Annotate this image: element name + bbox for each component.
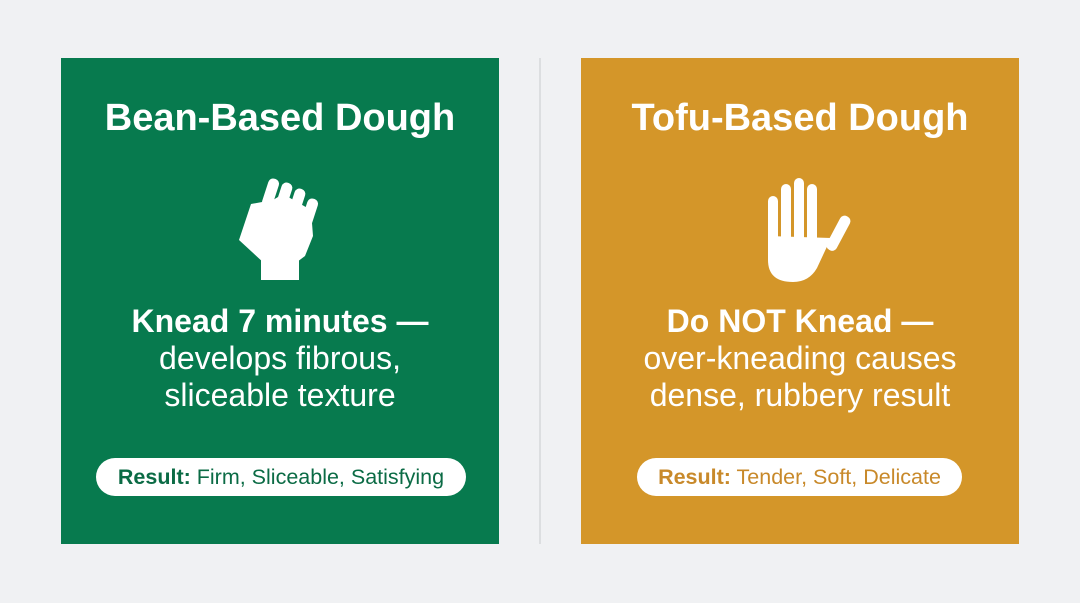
pill: result: Result: Tender, Soft, Delicate — [658, 465, 941, 489]
pill: result — [637, 458, 962, 496]
text: knead instruction: sliceable texture — [164, 377, 396, 413]
pill: result — [96, 458, 466, 496]
text: knead instruction — [132, 303, 428, 413]
text: do not knead: over-kneading causes — [643, 340, 957, 376]
divider — [539, 58, 541, 544]
text: do not knead — [643, 303, 957, 413]
heading: tofu: Tofu-Based Dough — [631, 97, 969, 139]
text: do not knead: Do NOT Knead — — [667, 303, 933, 339]
text: knead instruction: develops fibrous, — [159, 340, 401, 376]
icon: open hand — [768, 178, 850, 282]
panel: bean-based dough — [61, 58, 499, 544]
text: do not knead: dense, rubbery result — [650, 377, 950, 413]
pill: result: Result: Firm, Sliceable, Satisfying — [118, 465, 444, 489]
icon: fist — [239, 178, 318, 280]
panel: tofu-based dough — [581, 58, 1019, 544]
text: knead instruction: Knead 7 minutes — — [132, 303, 428, 339]
heading: bean: Bean-Based Dough — [105, 97, 455, 139]
